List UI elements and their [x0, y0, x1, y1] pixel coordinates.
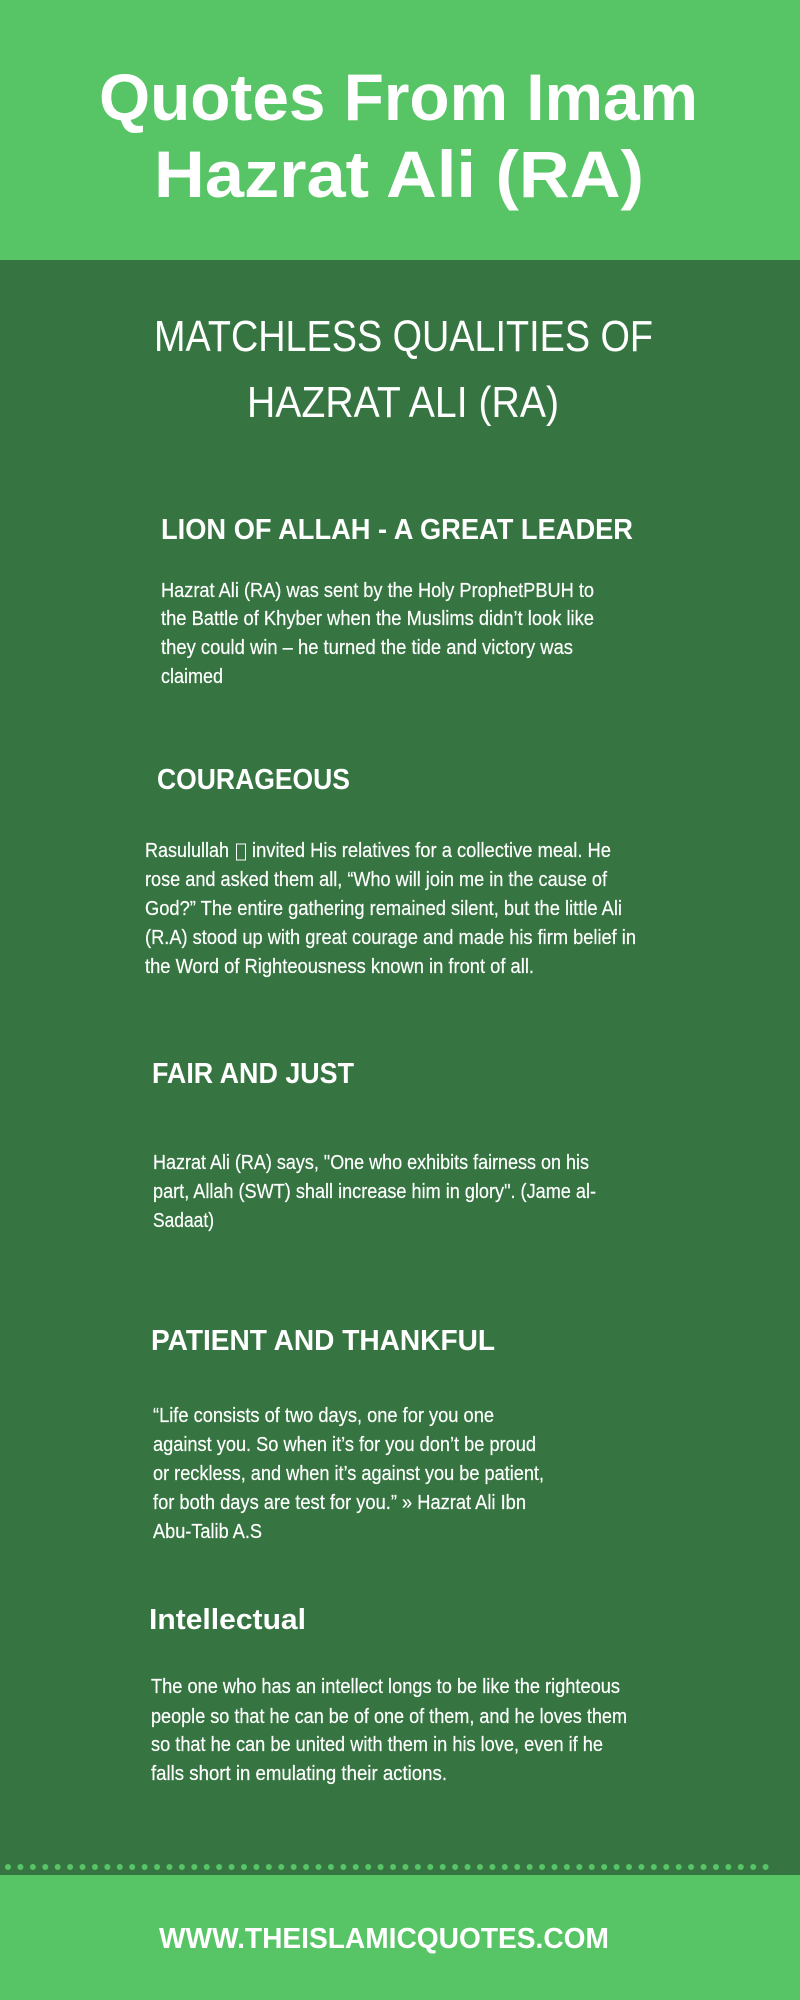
title: [99, 60, 698, 211]
subtitle heading: MATCHLESS QUALITIES OF: [154, 312, 653, 361]
text block: patient and thankful: [153, 1404, 544, 1543]
subtitle heading: [154, 312, 653, 427]
text block: patient and thankful: or reckless, and when it’s against you be patient,: [153, 1462, 544, 1485]
text block: courageous: (R.A) stood up with great courage and made his firm belief in: [145, 926, 636, 949]
text block: patient and thankful: against you. So when it’s for you don’t be proud: [153, 1433, 536, 1456]
heading: patient and thankful: PATIENT AND THANKFUL: [151, 1325, 495, 1357]
text block: courageous: Rasulullah: [145, 839, 229, 862]
section: courageous: [145, 764, 636, 978]
text block: courageous: rose and asked them all, “Who will join me in the cause of: [145, 868, 607, 891]
heading: courageous: COURAGEOUS: [157, 764, 350, 796]
text block: courageous: the Word of Righteousness known in front of all.: [145, 955, 534, 978]
footer band: [0, 1875, 800, 2000]
text block: fair and just: [153, 1151, 596, 1232]
text block: lion of Allah: the Battle of Khyber when the Muslims didn’t look like: [161, 607, 594, 630]
text block: fair and just: part, Allah (SWT) shall increase him in glory". (Jame al-: [153, 1180, 596, 1203]
heading: fair and just: FAIR AND JUST: [152, 1058, 354, 1090]
section: intellectual: [149, 1604, 627, 1785]
heading: lion of Allah: LION OF ALLAH - A GREAT LEADER: [161, 514, 633, 546]
text block: lion of Allah: claimed: [161, 665, 223, 688]
section: lion of Allah: [161, 514, 633, 688]
footer website: WWW.THEISLAMICQUOTES.COM: [159, 1923, 609, 1955]
text block: patient and thankful: “Life consists of two days, one for you one: [153, 1404, 494, 1427]
heading: intellectual: Intellectual: [149, 1604, 306, 1636]
title: Quotes From Imam: [99, 60, 698, 134]
text block: fair and just: Hazrat Ali (RA) says, "One who exhibits fairness on his: [153, 1151, 589, 1174]
text block: patient and thankful: for both days are test for you.” » Hazrat Ali Ibn: [153, 1491, 526, 1514]
text block: lion of Allah: they could win – he turned the tide and victory was: [161, 636, 573, 659]
section: fair and just: [152, 1058, 596, 1232]
text block: lion of Allah: [161, 579, 594, 688]
text block: intellectual: so that he can be united with them in his love, even if he: [151, 1733, 603, 1756]
text block: courageous: invited His relatives for a collective meal. He: [252, 839, 611, 862]
text block: fair and just: Sadaat): [153, 1209, 214, 1232]
subtitle heading: HAZRAT ALI (RA): [247, 378, 559, 427]
text block: courageous: God?” The entire gathering remained silent, but the little Ali: [145, 897, 622, 920]
text block: intellectual: The one who has an intellect longs to be like the righteous: [151, 1675, 620, 1698]
text block: lion of Allah: Hazrat Ali (RA) was sent by the Holy ProphetPBUH to: [161, 579, 594, 602]
dotted separator: [8, 1864, 766, 1870]
title: Hazrat Ali (RA): [154, 137, 644, 211]
text block: patient and thankful: Abu-Talib A.S: [153, 1520, 262, 1543]
text block: intellectual: [151, 1675, 627, 1785]
section: patient and thankful: [151, 1325, 544, 1543]
text block: intellectual: falls short in emulating their actions.: [151, 1762, 447, 1785]
header band: [0, 0, 800, 260]
text block: courageous: [145, 839, 636, 978]
text block: intellectual: people so that he can be of one of them, and he loves them: [151, 1705, 627, 1728]
